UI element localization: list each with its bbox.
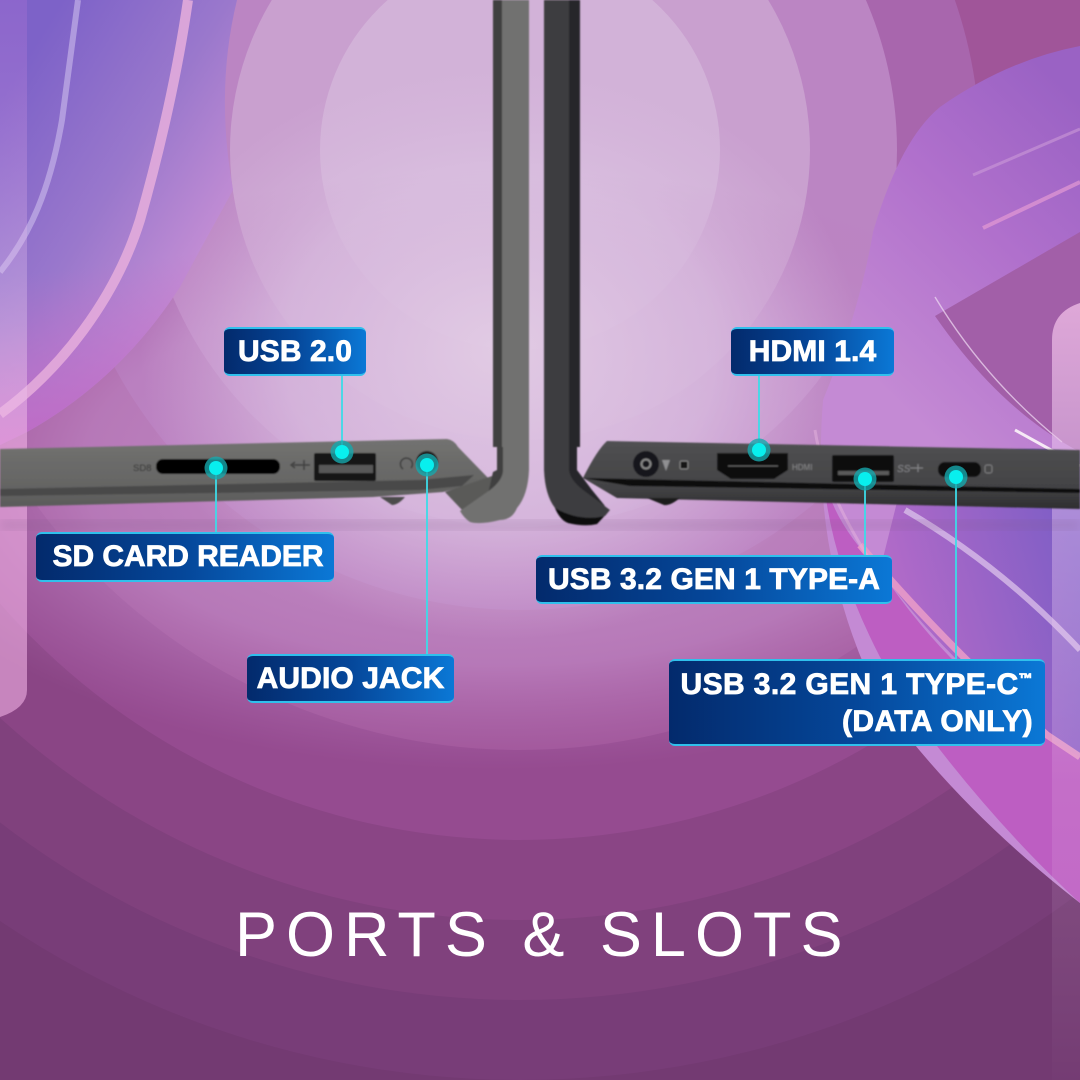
laptop illustration: right side: HDMI: [792, 463, 812, 472]
laptop base: right: [583, 441, 1080, 509]
label: audio jack: AUDIO JACK: [257, 662, 444, 695]
lid inner dark strip: right: [566, 0, 605, 506]
laptop illustration: left side: SD8: [133, 463, 151, 474]
lid: right: [544, 0, 610, 525]
hdmi port: [717, 453, 788, 479]
lid inner dark strip: left: [488, 0, 507, 510]
label: USB 3.2 Gen 1 Type-C: [669, 659, 1045, 746]
label: USB 2.0: USB 2.0: [238, 335, 352, 368]
floor shadow: [0, 520, 1080, 530]
hinge foot: right: [555, 508, 610, 525]
laptop base: left: [0, 439, 490, 507]
label: SD card reader: SD CARD READER: [52, 540, 324, 573]
connector lines: [216, 376, 956, 659]
title: PORTS & SLOTS: [235, 900, 851, 970]
card slot: [156, 459, 280, 474]
label: USB 3.2 Gen 1 Type-C: USB 3.2 GEN 1 TYPE-C™: [680, 668, 1033, 701]
usb-c port: [938, 462, 981, 477]
label: audio jack: [247, 654, 454, 703]
label: USB 3.2 Gen 1 Type-A: USB 3.2 GEN 1 TYPE-A: [548, 563, 880, 596]
label: USB 3.2 Gen 1 Type-A: [536, 555, 892, 604]
power jack: [633, 451, 659, 477]
label: USB 2.0: [224, 327, 366, 376]
laptop illustration: right side: SS: [897, 464, 911, 475]
usb-a port right: [832, 455, 894, 482]
hinge block: left: [445, 476, 492, 510]
side panels: [0, 0, 27, 717]
right blob: [815, 46, 1080, 903]
audio jack: [416, 451, 438, 473]
label: SD card reader: [36, 532, 334, 582]
port markers: [204, 438, 968, 490]
swooshes left: [0, 0, 237, 445]
label: USB 3.2 Gen 1 Type-C: (DATA ONLY): [842, 705, 1033, 738]
label: HDMI 1.4: HDMI 1.4: [749, 335, 876, 368]
lid: left: [460, 0, 529, 523]
usb-a port left: [314, 453, 376, 481]
label: HDMI 1.4: [731, 327, 894, 376]
